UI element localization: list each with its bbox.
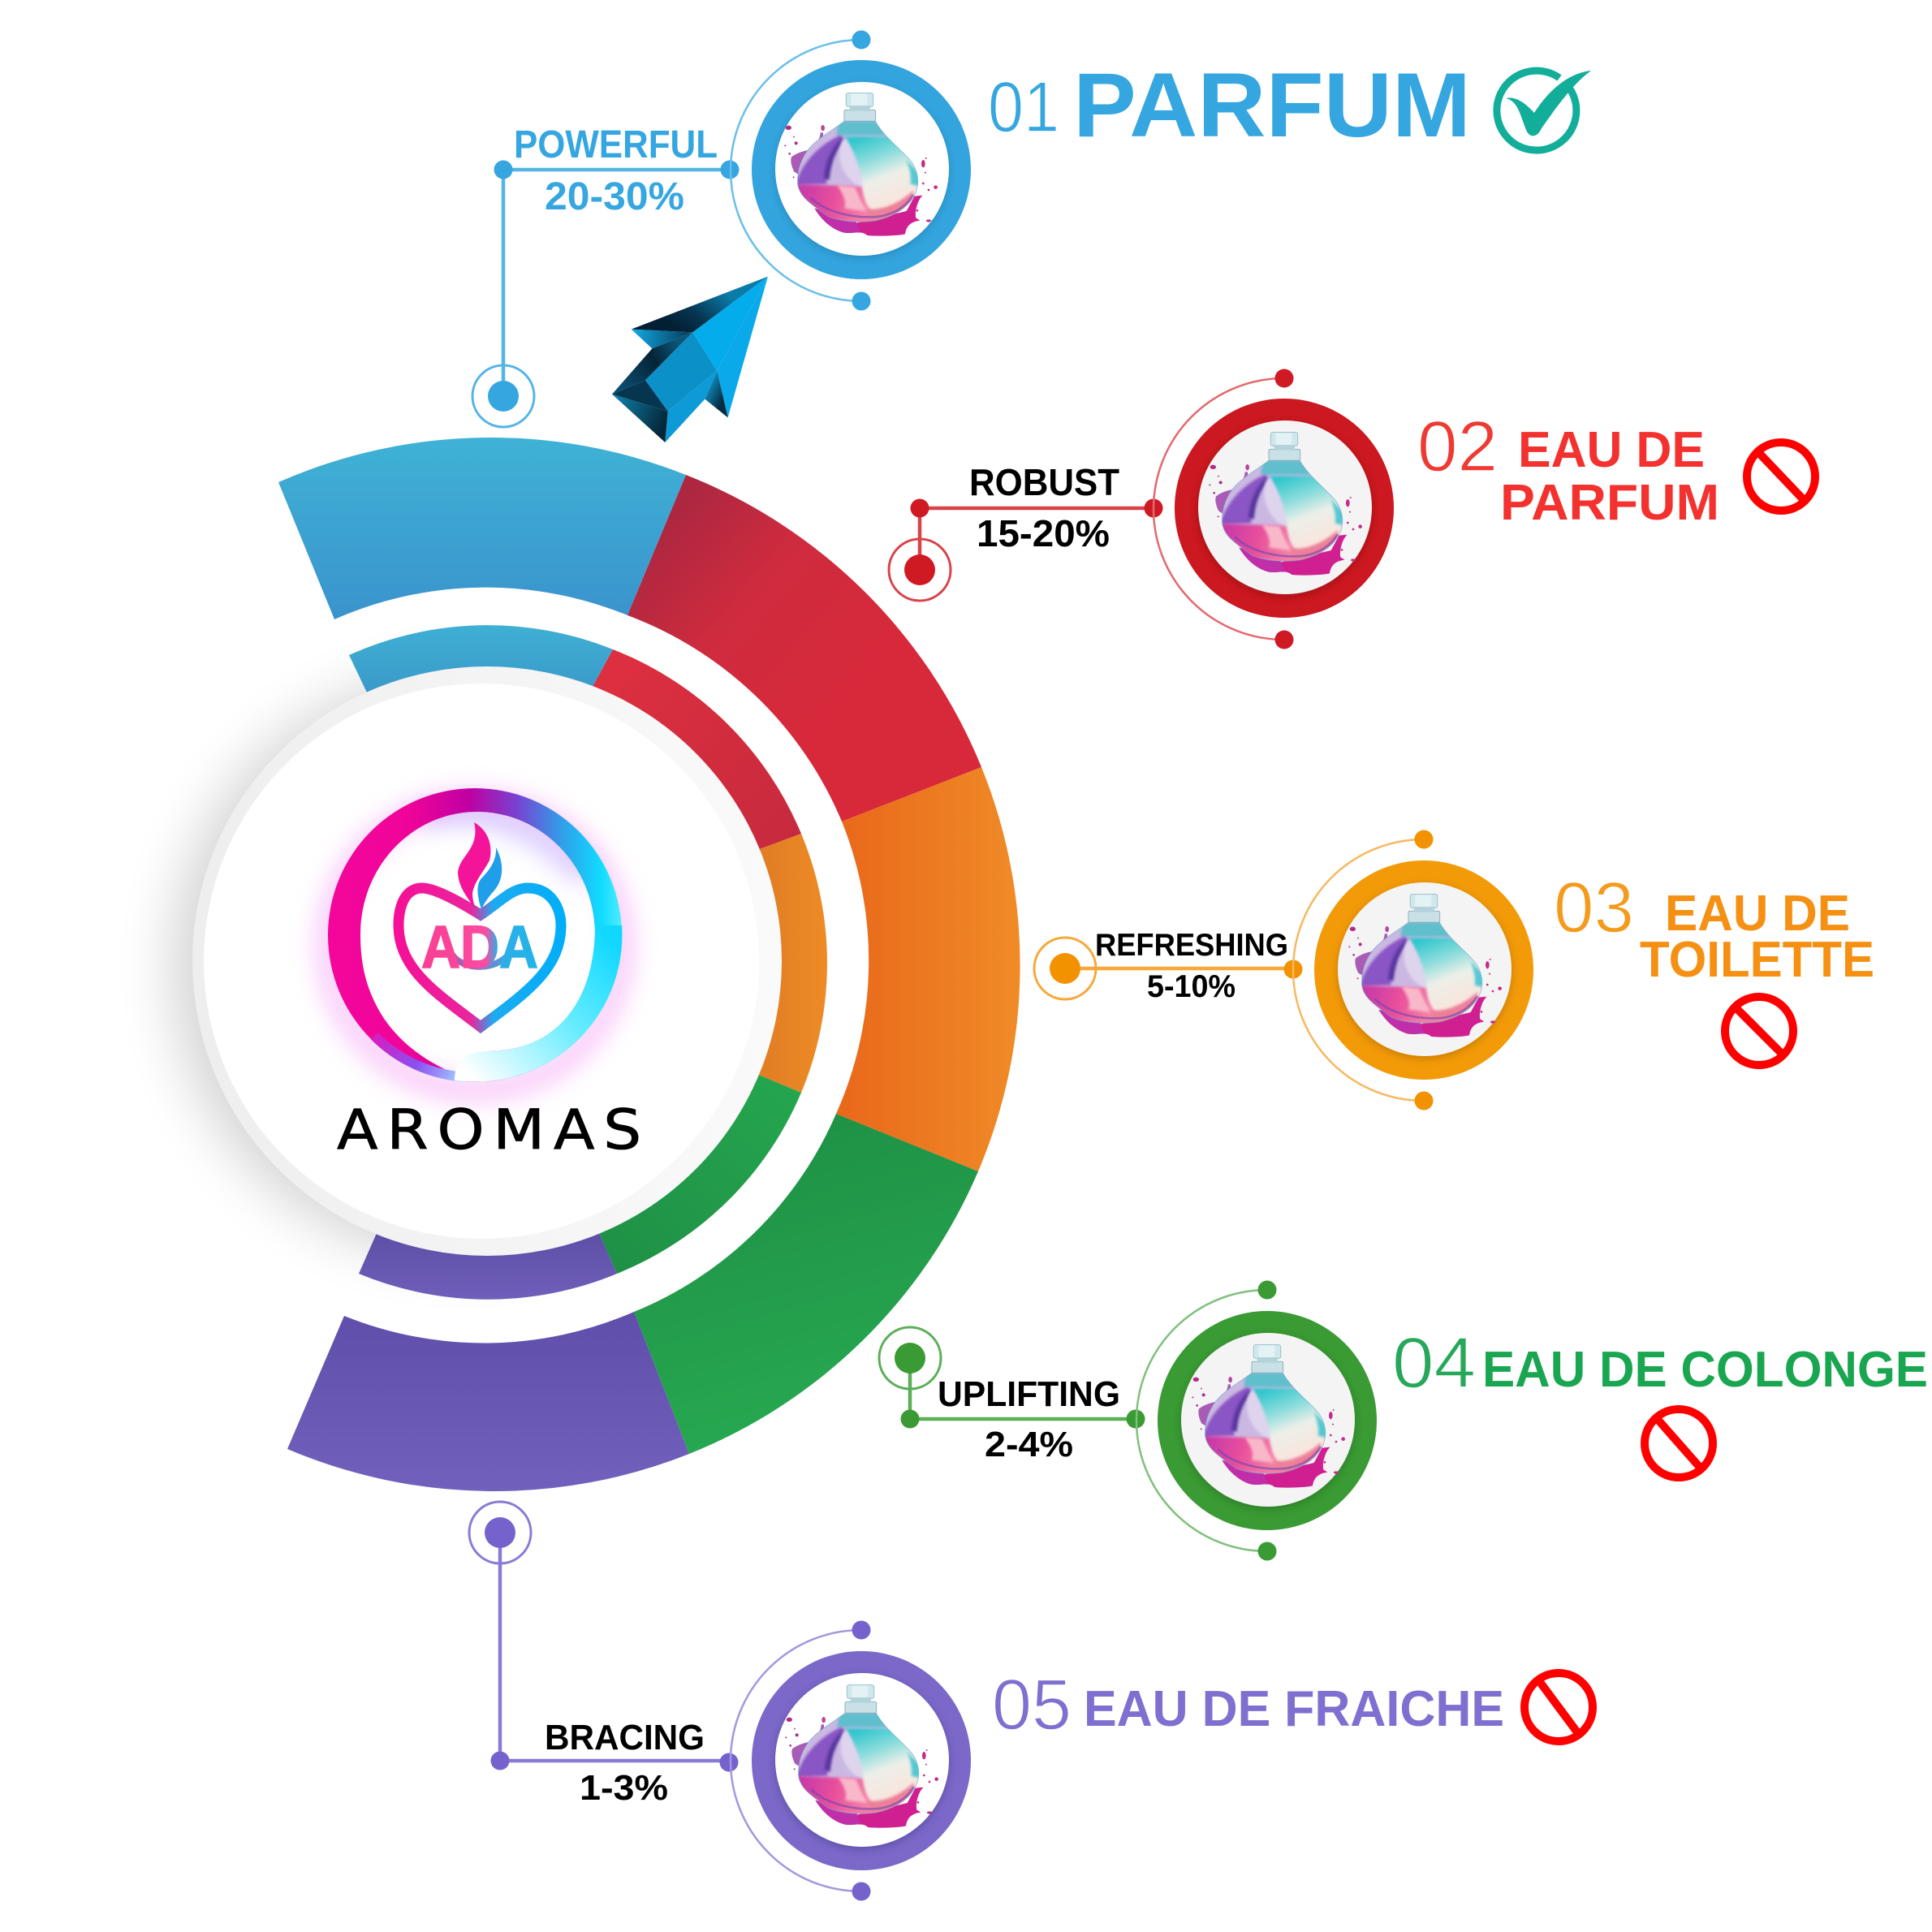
logo blue flame <box>477 847 502 909</box>
number 01: 01 <box>988 67 1059 147</box>
logo ring pale sweep <box>455 925 622 1082</box>
logo ADA swoosh <box>452 953 510 967</box>
connector 01 <box>472 161 739 427</box>
segment: parfum blue <box>278 438 686 619</box>
panel 02: eau de parfum <box>889 369 1815 649</box>
panel 04: eau de cologne <box>879 1281 1928 1560</box>
label 02: ROBUST <box>969 461 1119 503</box>
heading eau de toilette: EAU DE <box>1665 886 1850 942</box>
logo: Ada Aromas <box>327 788 650 1162</box>
wordmark: AROMAS <box>337 1098 650 1162</box>
inner segment: red <box>588 649 801 852</box>
badge 02 with bottle <box>1154 369 1394 649</box>
badge 04 with bottle <box>1136 1281 1377 1560</box>
heading parfum: PARFUM <box>1073 54 1471 156</box>
icon: approved check <box>1497 71 1591 150</box>
connector 02 <box>889 498 1162 601</box>
inner segment: orange <box>751 834 827 1093</box>
logo heart <box>399 888 561 1027</box>
donut chart: outer ring <box>278 438 1020 1491</box>
heading eau de fraiche: EAU DE FRAICHE <box>1084 1681 1504 1737</box>
concentration 01: 20-30% <box>545 175 684 218</box>
label 01: POWERFUL <box>514 123 718 166</box>
logo glow <box>327 801 623 1090</box>
logo ring <box>328 788 622 1082</box>
heading eau de toilette <box>1640 886 1874 988</box>
centre disc <box>192 666 782 1256</box>
number 03: 03 <box>1554 867 1634 947</box>
connector 03 <box>1034 938 1302 999</box>
inner segment: blue <box>349 625 613 706</box>
heading eau de toilette: TOILETTE <box>1640 932 1874 988</box>
icon: prohibited <box>1645 1409 1713 1477</box>
logo ring tail <box>374 1036 467 1077</box>
concentration 02: 15-20% <box>977 512 1110 554</box>
badge 01 with bottle <box>731 31 971 310</box>
logo pink flame <box>458 822 490 911</box>
panel 05: eau fraiche <box>469 1502 1593 1901</box>
number 04: 04 <box>1392 1322 1476 1403</box>
concentration 05: 1-3% <box>580 1768 668 1808</box>
connector 04 <box>879 1327 1145 1429</box>
panel 01: parfum <box>472 31 1591 427</box>
icon: prohibited <box>1524 1673 1593 1741</box>
concentration 03: 5-10% <box>1147 969 1236 1004</box>
donut chart: inner ring <box>349 625 827 1300</box>
logo ADA letters: ADA <box>421 913 538 981</box>
segment: eau fraiche purple <box>287 1312 689 1491</box>
label 05: BRACING <box>545 1718 705 1757</box>
segment: eau de parfum red <box>627 475 981 822</box>
panel 03: eau de toilette <box>1034 830 1874 1110</box>
badge 05 with bottle <box>731 1620 971 1901</box>
segment: eau de cologne green <box>634 1114 978 1454</box>
heading eau de colonge: EAU DE COLONGE <box>1482 1342 1928 1398</box>
segment: eau de toilette orange <box>836 767 1020 1171</box>
icon: paper plane arrow <box>612 277 768 442</box>
icon: prohibited <box>1747 442 1815 511</box>
label 04: UPLIFTING <box>938 1374 1120 1414</box>
number 05: 05 <box>992 1664 1072 1744</box>
inner segment: purple <box>359 1226 617 1300</box>
heading eau de parfum <box>1500 422 1719 531</box>
number 02: 02 <box>1417 406 1498 486</box>
label 03: REFRESHING <box>1095 928 1288 963</box>
connector 05 <box>469 1502 739 1771</box>
heading eau de parfum: EAU DE <box>1518 422 1705 478</box>
icon: prohibited <box>1725 997 1793 1065</box>
badge 03 with bottle <box>1293 830 1533 1110</box>
heading eau de parfum: PARFUM <box>1500 475 1719 531</box>
drop shadow of centre disc <box>172 674 757 1258</box>
concentration 04: 2-4% <box>985 1425 1073 1464</box>
inner segment: green <box>597 1072 801 1274</box>
